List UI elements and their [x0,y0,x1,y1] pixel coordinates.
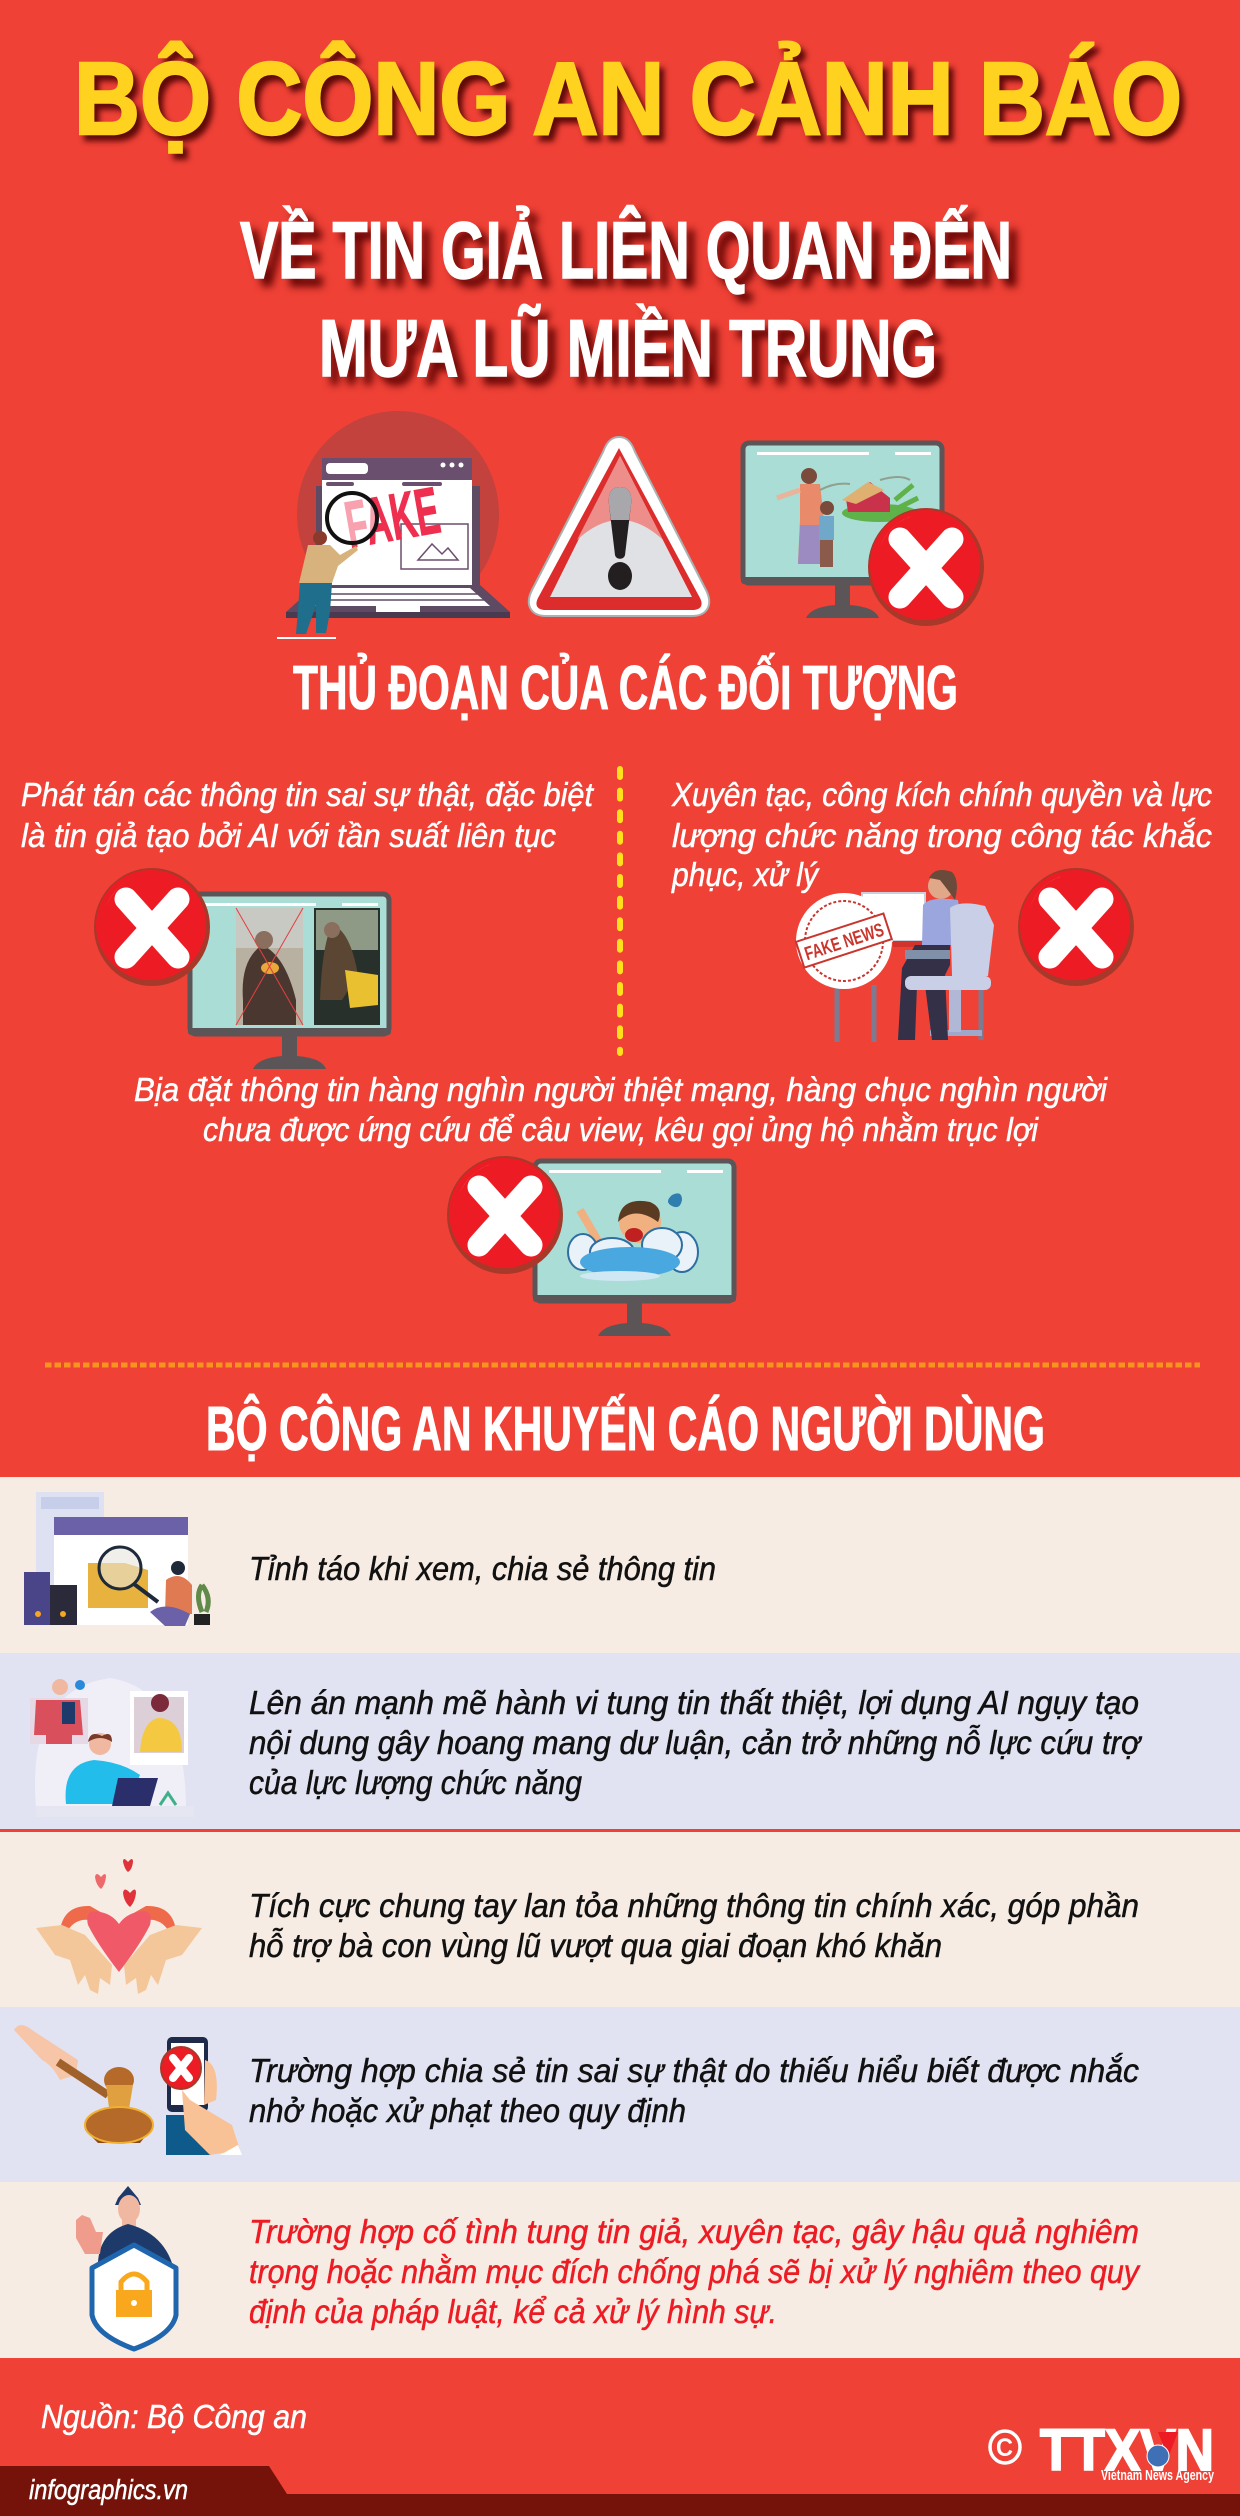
icon: police and shield [76,2186,176,2349]
text: tactic 1 [21,776,595,854]
text: recommendation 1: Tỉnh táo khi xem, chia sẻ thông tin [249,1550,716,1587]
panel: recommendation 2 [0,1653,1240,1832]
divider: orange dots [45,1362,1200,1368]
icon: gavel and phone [14,2025,242,2155]
logo: TTXVN: C [996,2434,1013,2462]
icon: drowning person on monitor [447,1156,736,1336]
text: tactic 2 [671,776,1212,893]
text: recommendation 2 [249,1684,1143,1801]
panel: recommendation 4 [0,2007,1240,2182]
icon: flood family on monitor with X [741,443,984,626]
text: recommendation 3: hỗ trợ bà con vùng lũ vượt qua giai đoạn khó khăn [249,1927,942,1964]
text: recommendation 2: của lực lượng chức năng [249,1764,583,1801]
text: recommendation 4: nhở hoặc xử phạt theo quy định [249,2092,686,2129]
panel: recommendation 1 [0,1477,1240,1653]
subtitle [240,204,1012,394]
icon: monitor with fake photos [94,868,391,1069]
text: recommendation 4 [249,2052,1139,2129]
text: tactic 2: phục, xử lý [671,856,820,893]
text: recommendation 5: định của pháp luật, kể cả xử lý hình sự. [249,2293,777,2330]
icon: people on social media [30,1678,194,1817]
footer bar [0,2466,1240,2516]
panel: recommendation 5 [0,2182,1240,2358]
text: tactic 2: lượng chức năng trong công tác khắc [672,817,1212,854]
text: tactic 1: Phát tán các thông tin sai sự thật, đặc biệt [21,776,595,813]
icon: fake news laptop [277,411,510,638]
text: recommendation 3: Tích cực chung tay lan tỏa những thông tin chính xác, góp phần [249,1887,1139,1924]
text: tactic 3 [134,1071,1109,1148]
source: Nguồn: Bộ Công an [41,2398,307,2435]
text: recommendation 5 [249,2213,1141,2330]
text: tactic 3: Bịa đặt thông tin hàng nghìn người thiệt mạng, hàng chục nghìn người [134,1071,1109,1108]
subtitle: MƯA LŨ MIỀN TRUNG [319,303,937,394]
icon: hands holding heart [36,1859,202,1994]
text: recommendation 5: trọng hoặc nhằm mục đích chống phá sẽ bị xử lý nghiêm theo quy [249,2253,1141,2290]
website: infographics.vn [29,2474,188,2505]
text: tactic 1: là tin giả tạo bởi AI với tần suất liên tục [21,817,556,854]
divider: vertical dashes [617,769,623,1053]
icon: fake news worker at desk: FAKE NEWS [802,920,887,965]
logo: TTXVN: TTXVN [1040,2418,1214,2483]
text: recommendation 2: Lên án mạnh mẽ hành vi tung tin thất thiệt, lợi dụng AI ngụy tạo [249,1684,1139,1721]
icon: warning triangle [529,437,709,616]
text: recommendation 3 [249,1887,1139,1964]
panel: recommendation 3 [0,1832,1240,2007]
icon: fake news laptop: FAKE [340,473,445,562]
icon: document inspection [24,1492,210,1626]
text: recommendation 4: Trường hợp chia sẻ tin sai sự thật do thiếu hiểu biết được nhắc [249,2052,1139,2089]
text: recommendation 5: Trường hợp cố tình tung tin giả, xuyên tạc, gây hậu quả nghiêm [249,2213,1139,2250]
text: recommendation 2: nội dung gây hoang mang dư luận, cản trở những nỗ lực cứu trợ [249,1724,1143,1761]
icon: fake news worker at desk [796,868,1134,1042]
text: tactic 3: chưa được ứng cứu để câu view, kêu gọi ủng hộ nhằm trục lợi [203,1111,1040,1148]
